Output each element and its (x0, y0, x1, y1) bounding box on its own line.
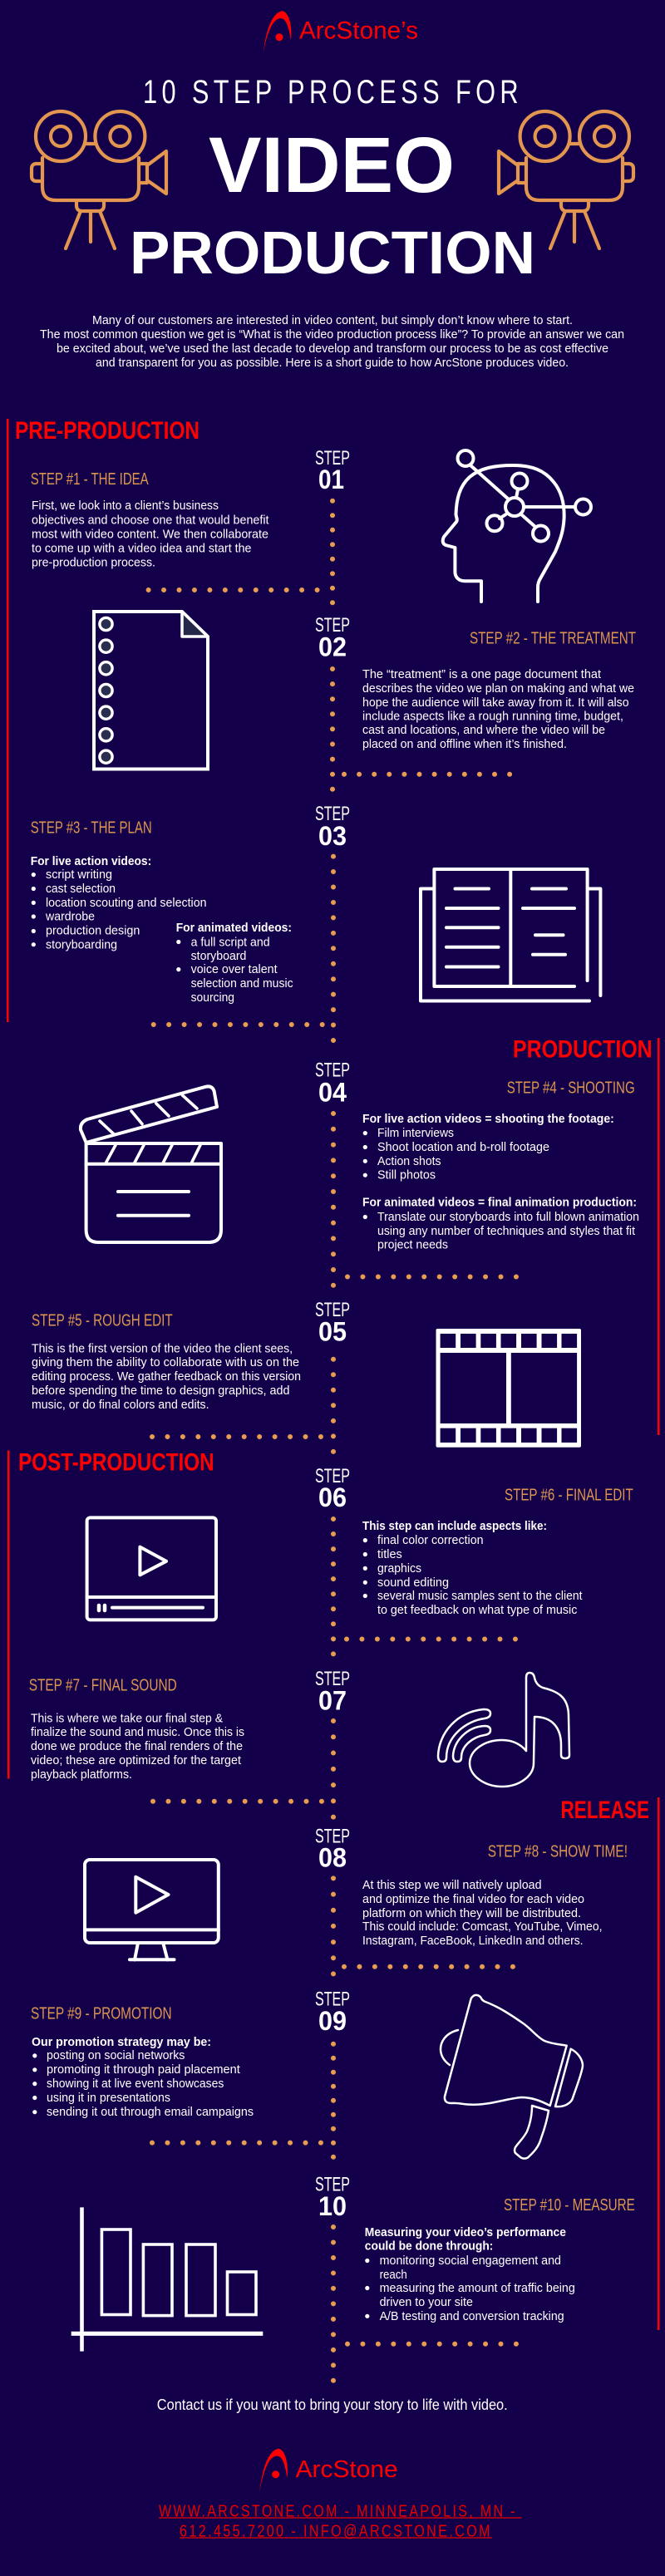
contact details (159, 2502, 522, 2540)
step 4 text: Action shots (377, 1154, 441, 1168)
step 2 text: cast and locations, and where the video will be (362, 723, 605, 737)
step 1 text: most with video content. We then collaborate (32, 527, 268, 542)
step 5 text: This is the first version of the video the client sees, (32, 1341, 293, 1355)
step 8 text: At this step we will natively upload (362, 1878, 542, 1892)
step 4 text: Shoot location and b-roll footage (377, 1140, 549, 1154)
step 7 text (31, 1712, 244, 1782)
step 3 live action list: production design (46, 924, 140, 938)
step 5 heading: STEP #5 - ROUGH EDIT (32, 1311, 173, 1330)
step 1 heading: STEP #1 - THE IDEA (31, 470, 149, 489)
step 1 text: First, we look into a client’s business (32, 499, 219, 513)
icon: script document (94, 612, 208, 769)
section bar: post-production (7, 1451, 10, 1778)
step 4 text (362, 1112, 639, 1251)
intro paragraph: Many of our customers are interested in video content, but simply don’t know where to start. (92, 313, 573, 327)
step 10 text: measuring the amount of traffic being (380, 2281, 575, 2295)
logo: ArcStone (259, 2449, 398, 2493)
step 10 marker: STEP (315, 2173, 350, 2195)
step 10 text: driven to your site (380, 2295, 473, 2309)
step 01 marker (315, 447, 350, 494)
icon: bar chart (71, 2207, 263, 2352)
step 5 text: giving them the ability to collaborate with us on the (32, 1355, 299, 1369)
step 10 text: reach (380, 2268, 407, 2282)
step 10 text: could be done through: (365, 2239, 493, 2254)
step 6 text: This step can include aspects like: (362, 1519, 547, 1533)
title: video: VIDEO (209, 121, 455, 209)
step 2 text: describes the video we plan on making and what we (362, 681, 634, 696)
step 06 marker: 06 (318, 1482, 347, 1512)
dotted timeline (149, 501, 517, 2382)
step 01 marker: 01 (318, 465, 344, 494)
step 07 marker (315, 1668, 350, 1715)
step 8 text: and optimize the final video for each video (362, 1892, 584, 1906)
step 6 text: final color correction (377, 1533, 484, 1547)
section bar: pre-production (7, 419, 8, 1022)
step 09 marker: STEP (315, 1988, 350, 2010)
contact details: 612.455.7200 - INFO@ARCSTONE.COM (180, 2522, 492, 2540)
step 2 text: The “treatment” is a one page document that (362, 667, 602, 681)
step 2 text: include aspects like a rough running time, budget, (362, 710, 623, 724)
logo: ArcStone's: ArcStone’s (299, 17, 418, 45)
icon: megaphone (441, 1995, 583, 2159)
step 6 text (362, 1519, 583, 1617)
step 5 text: before spending the time to design graphics, add (32, 1384, 289, 1398)
icon: monitor with play button (85, 1860, 219, 1959)
step 9 text: promoting it through paid placement (47, 2062, 241, 2077)
step 02 marker: 02 (318, 632, 347, 661)
logo: ArcStone: ArcStone (296, 2456, 398, 2483)
step 1 text (32, 499, 269, 570)
step 3 animated list: For animated videos: (176, 921, 292, 935)
step 3 live action list: cast selection (46, 882, 116, 896)
icon: music note (438, 1673, 569, 1787)
step 10 marker: 10 (318, 2191, 347, 2221)
step 10 text (365, 2225, 575, 2323)
step 09 marker: 09 (318, 2006, 347, 2036)
section heading: pre-production: PRE-PRODUCTION (15, 417, 200, 445)
step 10 text: A/B testing and conversion tracking (380, 2309, 564, 2323)
icon: video player (87, 1517, 216, 1620)
intro paragraph: and transparent for you as possible. Here is a short guide to how ArcStone produces video. (96, 356, 569, 370)
step 9 heading: STEP #9 - PROMOTION (31, 2004, 172, 2023)
step 05 marker: STEP (315, 1299, 350, 1321)
step 7 heading: STEP #7 - FINAL SOUND (29, 1676, 177, 1694)
step 4 text: Translate our storyboards into full blown animation (377, 1210, 639, 1224)
step 3 live action list: script writing (46, 868, 112, 882)
step 3 live action list (31, 854, 207, 952)
step 4 text: Film interviews (377, 1126, 454, 1140)
step 9 text: using it in presentations (47, 2091, 170, 2105)
step 6 text: several music samples sent to the client (377, 1589, 583, 1603)
step 7 text: video; these are optimized for the target (31, 1753, 242, 1767)
step 9 text: Our promotion strategy may be: (32, 2035, 211, 2049)
section bar: release (658, 1797, 660, 2330)
step 7 text: This is where we take our final step & (31, 1712, 223, 1726)
step 3 animated list: storyboard (191, 949, 246, 963)
step 3 live action list: storyboarding (46, 937, 117, 952)
step 09 marker (315, 1988, 350, 2036)
step 4 text: project needs (377, 1238, 448, 1251)
icon: open storyboard book (421, 869, 600, 1000)
step 6 text: graphics (377, 1561, 421, 1576)
icon: clapperboard (81, 1086, 221, 1242)
step 1 text: objectives and choose one that would benefit (32, 514, 269, 527)
step 2 text: placed on and offline when it’s finished. (362, 737, 567, 751)
step 4 text: For animated videos = final animation production: (362, 1196, 637, 1210)
title: production: PRODUCTION (130, 220, 535, 287)
step 6 text: titles (377, 1547, 402, 1561)
step 04 marker: 04 (318, 1078, 347, 1108)
step 03 marker (315, 803, 350, 851)
icon: film strip (436, 1329, 581, 1448)
logo: ArcStone's (264, 11, 418, 53)
step 05 marker: 05 (318, 1317, 347, 1347)
step 08 marker: STEP (315, 1825, 350, 1847)
step 10 text: monitoring social engagement and (380, 2254, 561, 2268)
step 8 heading: STEP #8 - SHOW TIME! (488, 1843, 628, 1861)
step 05 marker (315, 1299, 350, 1347)
step 9 text: showing it at live event showcases (47, 2077, 224, 2091)
icon: head with network (443, 450, 591, 602)
section heading: post-production: POST-PRODUCTION (18, 1449, 214, 1477)
step 03 marker: STEP (315, 803, 350, 825)
intro paragraph: The most common question we get is “What is the video production process like”? To provide an answer we can (40, 327, 624, 342)
step 1 text: pre-production process. (32, 555, 155, 570)
step 08 marker (315, 1825, 350, 1873)
step 3 animated list: sourcing (191, 991, 234, 1005)
step 07 marker: 07 (318, 1685, 347, 1715)
step 9 text: posting on social networks (47, 2048, 185, 2062)
step 07 marker: STEP (315, 1668, 350, 1690)
step 2 text: hope the audience will take away from it. It will also (362, 696, 629, 710)
step 3 animated list: a full script and (191, 935, 270, 949)
contact details: WWW.ARCSTONE.COM - MINNEAPOLIS, MN - (159, 2502, 517, 2520)
section bar: production (658, 1038, 660, 1435)
step 02 marker: STEP (315, 614, 350, 637)
step 8 text: Instagram, FaceBook, LinkedIn and others. (362, 1934, 584, 1948)
step 7 text: playback platforms. (31, 1767, 132, 1782)
contact line: Contact us if you want to bring your story to life with video. (157, 2397, 508, 2413)
step 3 live action list: wardrobe (45, 910, 95, 924)
step 1 text: to come up with a video idea and start the (32, 542, 251, 555)
step 08 marker: 08 (318, 1843, 347, 1873)
step 9 text (32, 2035, 254, 2119)
intro paragraph (40, 313, 624, 370)
step 3 heading: STEP #3 - THE PLAN (31, 819, 152, 838)
step 10 text: Measuring your video’s performance (365, 2225, 566, 2239)
step 2 text (362, 667, 634, 751)
step 5 text: music, or do final colors and edits. (32, 1398, 209, 1412)
step 9 text: sending it out through email campaigns (47, 2105, 254, 2119)
step 5 text (32, 1341, 301, 1412)
step 6 text: sound editing (377, 1576, 449, 1590)
step 3 live action list: location scouting and selection (46, 896, 206, 910)
step 3 animated list: voice over talent (191, 962, 278, 976)
step 06 marker: STEP (315, 1465, 350, 1487)
step 06 marker (315, 1465, 350, 1512)
step 02 marker (315, 614, 350, 661)
step 3 animated list (176, 921, 293, 1005)
step 3 animated list: selection and music (191, 976, 293, 991)
step 8 text: This could include: Comcast, YouTube, Vimeo, (362, 1920, 602, 1934)
step 8 text: platform on which they will be distributed. (362, 1906, 581, 1920)
step 7 text: finalize the sound and music. Once this is (31, 1725, 244, 1739)
step 4 text: For live action videos = shooting the footage: (362, 1112, 614, 1126)
step 5 text: editing process. We gather feedback on this version (32, 1369, 301, 1384)
step 4 text: Still photos (377, 1168, 436, 1182)
icon: right film camera (499, 111, 633, 248)
step 6 text: to get feedback on what type of music (377, 1603, 578, 1617)
step 3 live action list: For live action videos: (31, 854, 151, 868)
title: 10 step process for: 10 STEP PROCESS FOR (143, 74, 523, 111)
step 01 marker: STEP (315, 447, 350, 469)
step 04 marker (315, 1059, 350, 1108)
step 03 marker: 03 (318, 821, 347, 851)
step 7 text: done we produce the final renders of the (31, 1739, 243, 1753)
step 04 marker: STEP (315, 1059, 350, 1082)
step 10 marker (315, 2173, 350, 2221)
step 4 text: using any number of techniques and styles that fit (377, 1224, 636, 1238)
step 8 text (362, 1878, 602, 1948)
icon: left film camera (32, 111, 166, 248)
intro paragraph: be excited about, we’ve used the last decade to develop and transform our process to be as cost effective (57, 342, 608, 356)
